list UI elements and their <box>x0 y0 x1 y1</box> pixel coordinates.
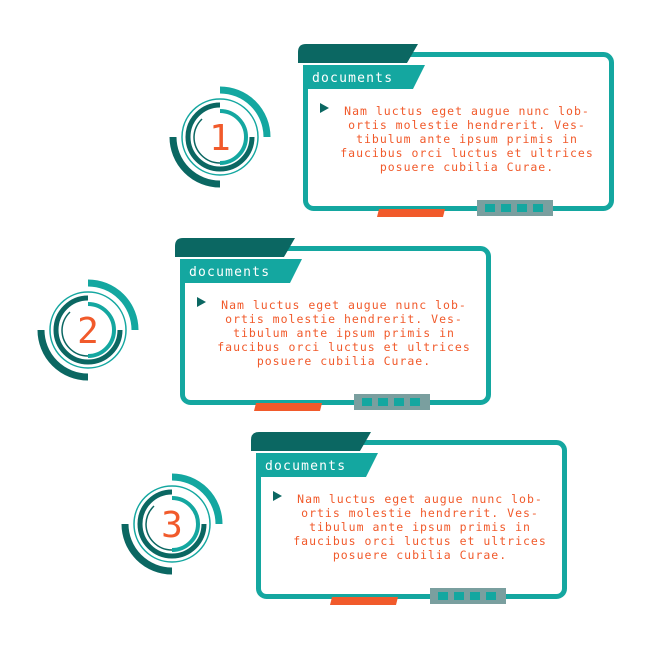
icon: ring 2: 2 <box>77 311 99 352</box>
panel 1 <box>298 44 612 217</box>
step 3 <box>125 432 564 605</box>
step 1 <box>173 44 612 217</box>
step 2 <box>41 238 488 411</box>
icon: ring 3: 3 <box>161 505 183 546</box>
icon: ring 2 <box>41 283 135 377</box>
panel 2 <box>175 238 488 411</box>
panel 3 <box>251 432 564 605</box>
icon: ring 1 <box>173 90 267 184</box>
icon: ring 1: 1 <box>209 118 231 159</box>
icon: ring 3 <box>125 477 219 571</box>
